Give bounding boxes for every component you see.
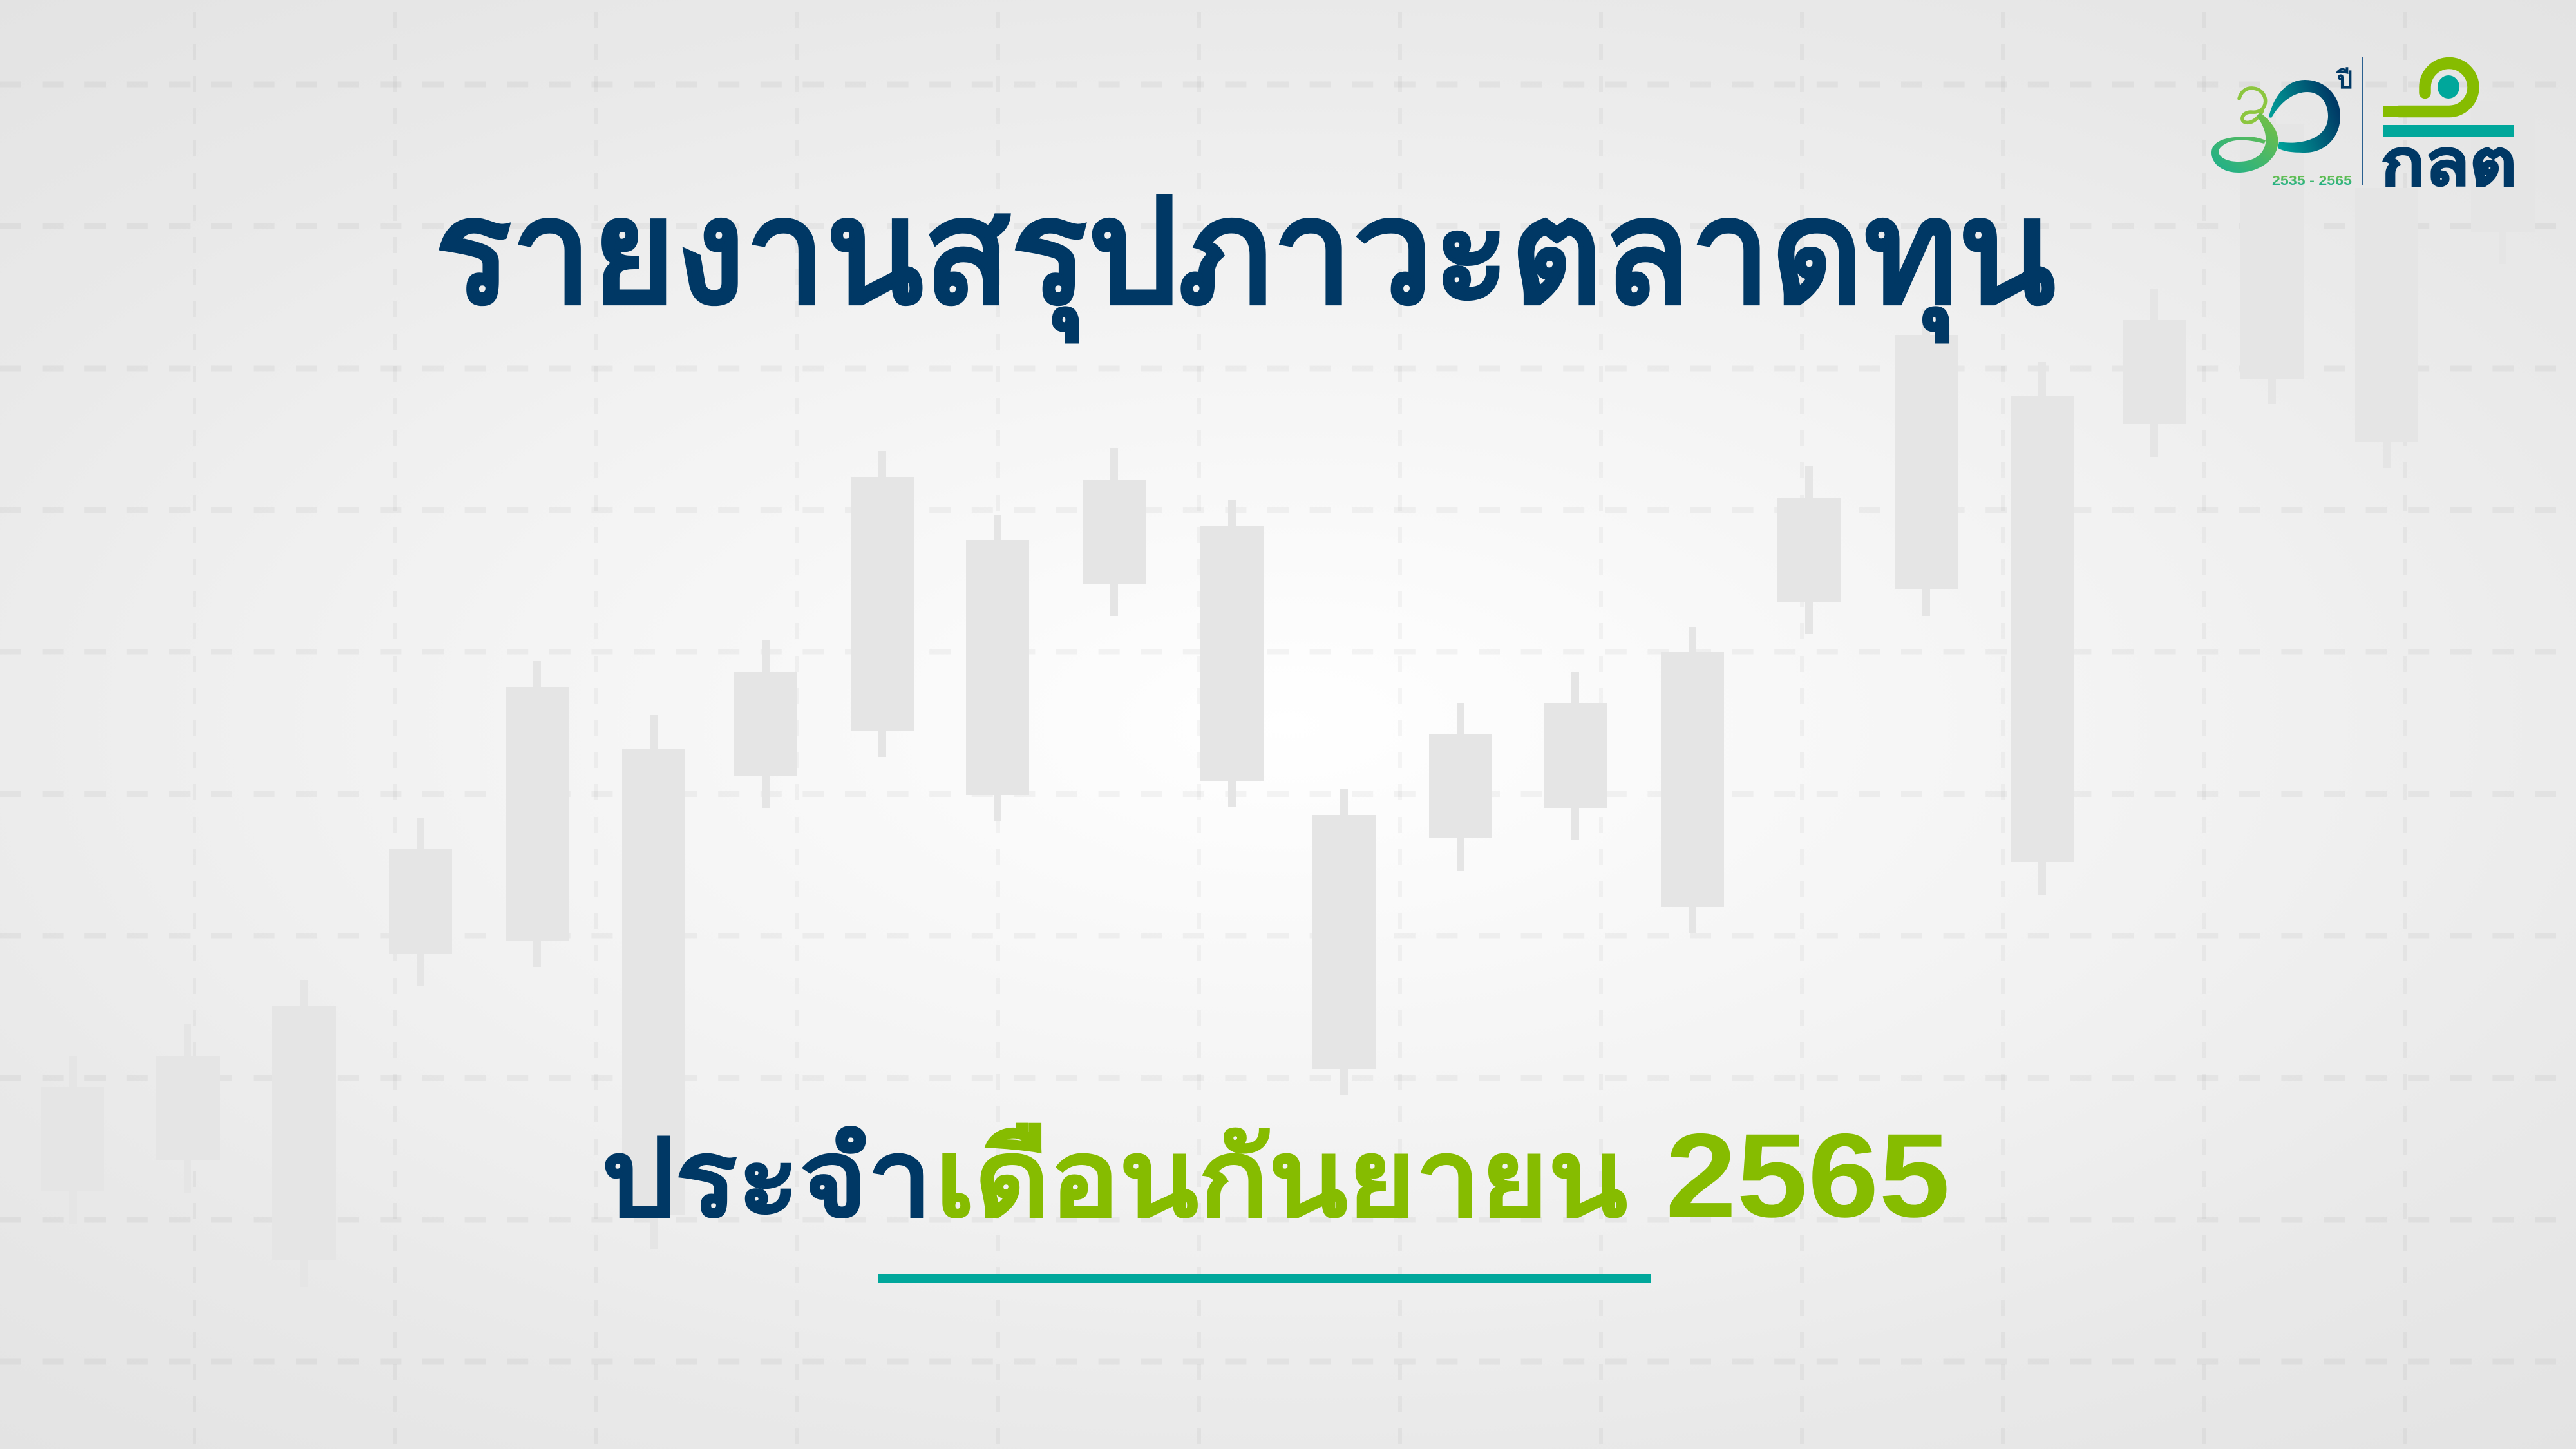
logo divider <box>2362 57 2363 185</box>
icon: green spiral <box>2399 63 2473 111</box>
icon: teal dot <box>2438 75 2459 99</box>
logo text: year mark: ปี <box>2336 67 2353 94</box>
subtitle part: month in green: เดือนกันยายน <box>935 1118 1627 1239</box>
subtitle: month and year <box>601 1110 1950 1242</box>
green bar end <box>2383 106 2403 117</box>
icon: ring of the number zero <box>2269 80 2340 153</box>
logo: SEC emblem <box>2381 63 2517 199</box>
subtitle part: year in green: 2565 <box>1665 1110 1950 1242</box>
icon: thin hook of the number three <box>2239 88 2266 122</box>
logo: 30th anniversary mark <box>2211 67 2353 188</box>
teal bar <box>2383 125 2514 137</box>
title: รายงานสรุปภาวะตลาดทุน <box>435 171 2056 344</box>
logo text: year range: 2535 - 2565 <box>2272 174 2352 188</box>
candlestick chart background <box>41 96 2535 1287</box>
subtitle part: navy: ประจำ <box>601 1118 933 1239</box>
teal underline <box>878 1274 1651 1283</box>
icon: ribbon of the number three <box>2211 113 2278 173</box>
logo text: กลต <box>2381 127 2517 199</box>
